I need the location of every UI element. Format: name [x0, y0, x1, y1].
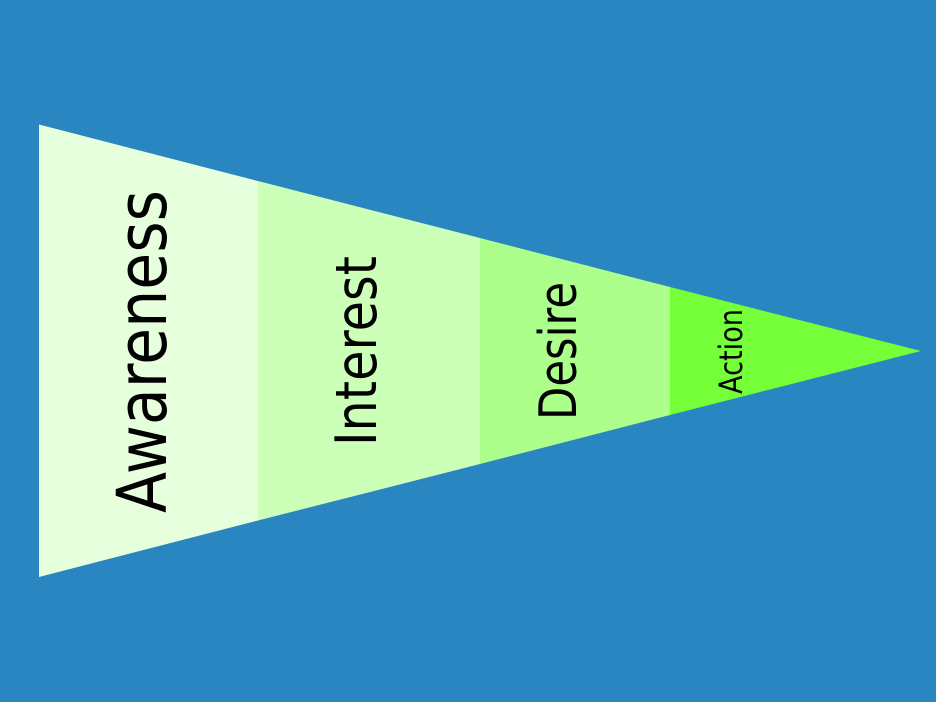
label: action: Action [712, 309, 750, 394]
segment: interest [258, 181, 480, 520]
label: awareness: Awareness [103, 190, 183, 513]
segment: awareness [39, 124, 258, 577]
label: desire: Desire [529, 282, 589, 420]
label: interest: Interest [324, 256, 390, 446]
segment: desire [480, 238, 670, 464]
segment: action [670, 287, 921, 415]
